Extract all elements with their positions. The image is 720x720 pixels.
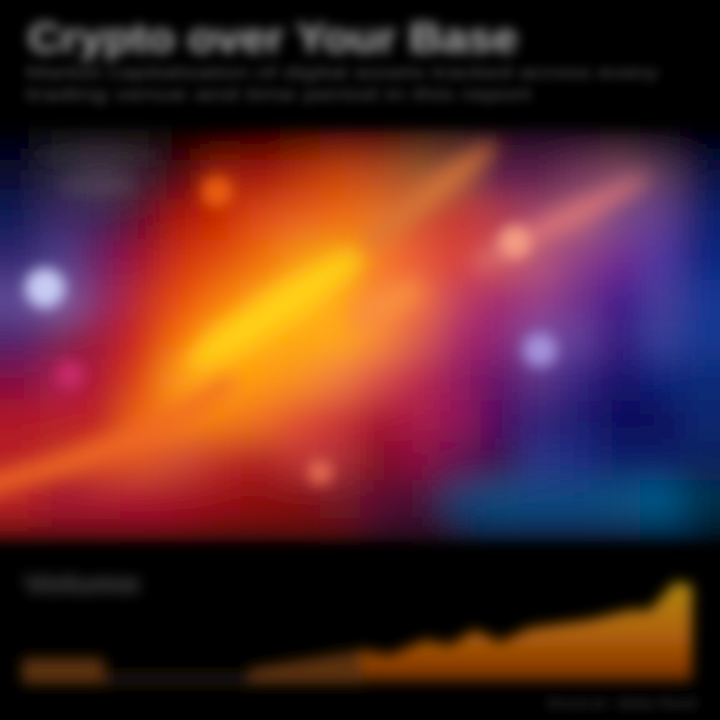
chart: rising left segment bbox=[250, 650, 364, 684]
bright spots bbox=[25, 176, 557, 485]
spot: pink peak bbox=[499, 226, 531, 258]
chart: bright area series bbox=[360, 582, 692, 682]
subtitle: Market capitalisation of digital assets tracked across every bbox=[26, 63, 659, 82]
subtitle: trading venue and time period in this report bbox=[26, 85, 531, 104]
chart: low left segment bbox=[22, 658, 104, 684]
flare: lower orange band bbox=[343, 274, 427, 336]
spot: top orange bbox=[201, 176, 233, 208]
subtitle bbox=[26, 63, 659, 104]
chart: faint middle segment bbox=[104, 672, 254, 686]
flare: lower left streak bbox=[0, 375, 240, 498]
spot: lower salmon bbox=[307, 459, 333, 485]
heatmap panel bbox=[0, 120, 720, 542]
flare: upper orange arm bbox=[357, 135, 503, 255]
main diagonal flare bbox=[0, 135, 503, 498]
heatmap label: Top assets bbox=[60, 177, 135, 194]
secondary pink flare bbox=[467, 169, 653, 275]
heatmap label: Market Volume bbox=[40, 147, 160, 164]
chart label: Volume bbox=[24, 571, 140, 598]
spot: left lilac bbox=[25, 268, 65, 308]
heatmap label bbox=[40, 147, 160, 194]
spot: right violet bbox=[523, 333, 557, 367]
title: Crypto over Your Base bbox=[28, 14, 518, 61]
source note: Source: data feed bbox=[546, 695, 696, 712]
area chart bbox=[22, 582, 692, 686]
spot: magenta bbox=[56, 361, 84, 389]
flare: yellow core bbox=[177, 238, 373, 382]
